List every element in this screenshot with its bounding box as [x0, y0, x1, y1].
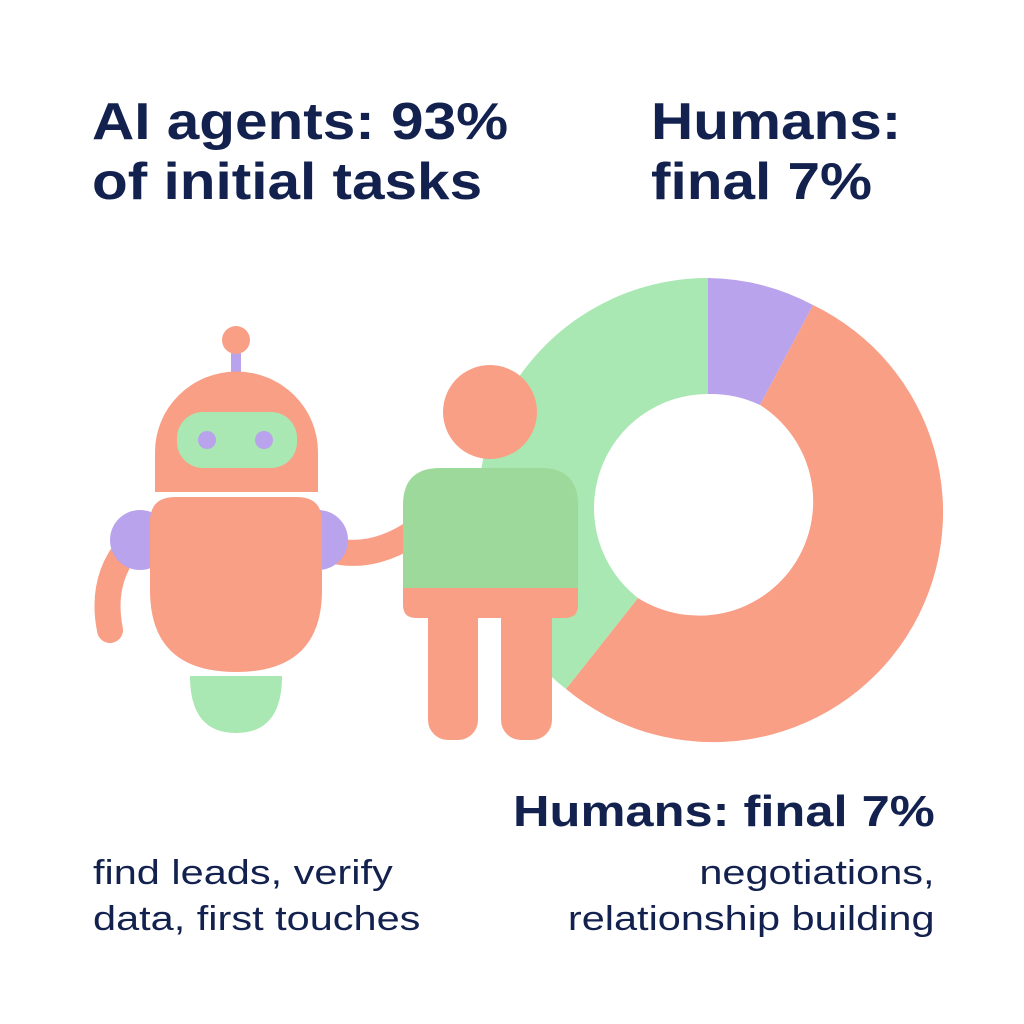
title: AI agents: of initial tasks: [92, 153, 482, 211]
text: human tasks: negotiations,: [700, 854, 935, 892]
title: Humans: final 7%: [651, 153, 872, 211]
heading: Humans final 7%: Humans: final 7%: [513, 787, 935, 836]
text: human tasks: [568, 854, 935, 938]
text: human tasks: relationship building: [568, 900, 935, 938]
text: AI tasks: find leads, verify: [93, 854, 393, 892]
title: AI agents: [92, 93, 508, 211]
text: AI tasks: [93, 854, 420, 938]
donut chart: [478, 278, 943, 742]
title: AI agents: AI agents: 93%: [92, 93, 508, 151]
title: Humans: [651, 93, 901, 211]
title: Humans: Humans:: [651, 93, 901, 151]
icon: robot: [108, 326, 410, 733]
icon: person: [403, 365, 578, 740]
text: AI tasks: data, first touches: [93, 900, 420, 938]
